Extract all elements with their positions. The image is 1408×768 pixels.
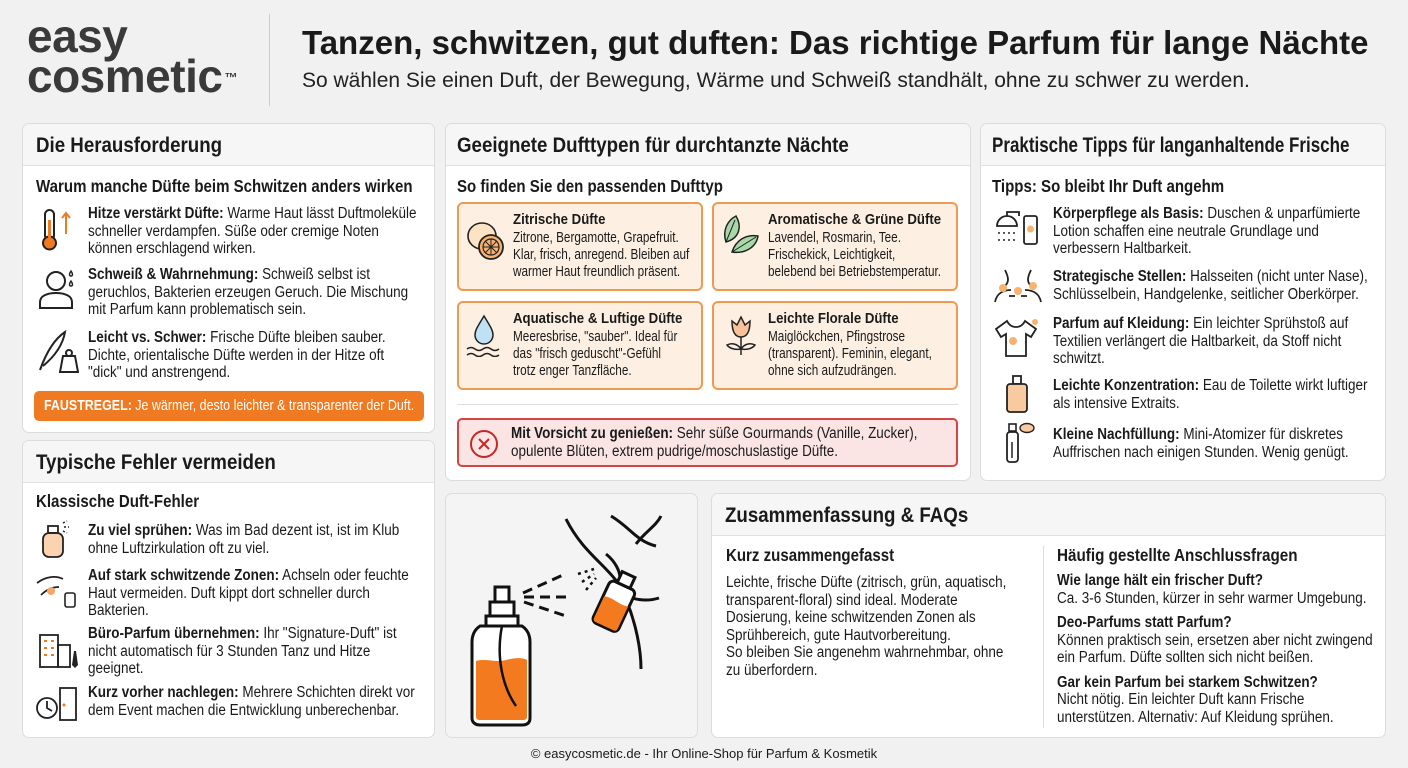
card: Aromatische: Frischekick, Leichtigkeit, [768,247,895,263]
card: Aquatische: das "frisch geduscht"-Gefühl [513,346,661,362]
illustration: spraying perfume [445,493,698,738]
FAQs: Gar kein Parfum bei starkem Schwitzen? [1057,674,1318,690]
item: Bakterien. [88,602,149,619]
item: Schweiss: geruchlos, Bakterien erzeugen Geruch. Die Mischung [88,284,408,300]
logo [27,10,237,102]
panel: Praktische Tipps [980,123,1386,481]
title: Tanzen, schwitzen, gut duften: Das richtige Parfum für lange Nächte [302,24,1369,61]
panel: Zusammenfassung & FAQs: Zusammenfassung & FAQs [725,503,968,527]
item: Leicht vs Schwer: "dick" und anstrengend. [88,364,230,381]
FAQs: Deo-Parfums statt Parfum? [1057,614,1232,631]
item [1053,426,1349,460]
panel: Die Herausforderung [22,123,435,433]
icon: armpit [36,576,76,608]
item [88,522,399,556]
subtitle: So wählen Sie einen Duft, der Bewegung, Wärme und Schweiß standhält, ohne zu schwer zu werden. [302,69,1250,92]
FAQs: ein Parfum. Düfte sollten sich nicht beißen. [1057,649,1313,666]
subheading: Klassische Duft-Fehler [36,491,199,511]
item: Strategische Stellen: Halsseiten (nicht unter Nase), [1053,268,1368,285]
item: als intensive Extraits. [1053,394,1180,412]
FAQs: Nicht nötig. Ein leichter Duft kann Frische [1057,691,1304,708]
panel: Dufttypen: Geeignete Dufttypen für durchtanzte Nächte [457,133,849,157]
item: Hitze: Hitze verstärkt Düfte: Warme Haut lässt Duftmoleküle [88,205,416,222]
panel: Typische Fehler: Typische Fehler vermeiden [36,450,276,474]
subheading: Kurz zusammengefasst: Kurz zusammengefasst [726,545,894,565]
item: Schlüsselbein, Handgelenke, seitlicher Oberkörper. [1053,286,1359,302]
panel: Die Herausforderung: Die Herausforderung [36,133,222,157]
item: Textilien verlängert die Haltbarkeit, da Stoff nicht [1053,332,1341,350]
item: Hitze [88,205,416,257]
card: Aromatische: belebend bei Betriebstemperatur. [768,264,941,280]
logo: cosmetic™ [27,50,237,102]
icon: leaves [724,215,759,254]
item: Schweiss [88,266,408,318]
footer: © easycosmetic.de - Ihr Online-Shop für Parfum & Kosmetik [531,746,877,761]
icon: feather and weight [39,330,79,373]
text: summary [726,574,1006,678]
card: Aquatische [457,301,703,390]
card: Florale: ohne sich aufzudrängen. [768,363,897,379]
item [88,684,415,718]
item: Schweiss: Schweiß & Wahrnehmung: Schweiß selbst ist [88,266,370,283]
card: Zitrische: warmer Haut freundlich präsent. [513,264,680,280]
item: verbessern Haltbarkeit. [1053,240,1192,257]
item: Kleine Nachfüllung: Mini-Atomizer für diskretes [1053,426,1343,443]
icon: lemon [467,222,504,260]
item: Körperpflege als Basis: Duschen & unparfümierte [1053,205,1360,222]
item [88,625,397,677]
item [1053,205,1360,257]
icon: x circle [470,430,498,458]
card: Aromatische [712,202,958,291]
FAQs: Können praktisch sein, ersetzen aber nicht zwingend [1057,632,1373,648]
icon: atomizer [1006,422,1035,463]
item [1053,315,1348,367]
item [1053,377,1368,412]
icon: tulip [726,316,756,355]
item: Parfum auf Kleidung: Ein leichter Sprühstoß auf [1053,315,1348,332]
FAQs: unterstützen. Alternativ: Auf Kleidung sprühen. [1057,708,1334,726]
item: Hitze: können erschlagend wirken. [88,240,256,257]
item: Leicht vs Schwer: Dichte, orientalische Düfte werden in der Hitze oft [88,346,384,364]
card: Aromatische: Aromatische & Grüne Düfte [768,211,941,228]
panel: Dufttypen [445,123,971,481]
item: ohne Luftzirkulation oft zu viel. [88,540,269,556]
item: Kurz vorher nachlegen: Mehrere Schichten direkt vor [88,684,415,701]
card: Florale: (transparent). Feminin, elegant, [768,346,932,362]
FAQs: Häufig gestellte Anschlussfragen [1057,545,1298,565]
FAQs: Ca. 3-6 Stunden, kürzer in sehr warmer Umgebung. [1057,590,1367,606]
text: summary: transparent-floral) sind ideal. Moderate [726,592,958,608]
item: Auffrischen nach einigen Stunden. Wenig genügt. [1053,444,1349,460]
item: Auf stark schwitzende Zonen: Achseln oder feuchte [88,567,409,584]
card: Zitrische: Zitrische Düfte [513,211,605,228]
callout: Vorsicht [457,418,958,467]
item: dem Event machen die Entwicklung unberechenbar. [88,702,399,718]
FAQs: Wie lange hält ein frischer Duft? [1057,572,1263,589]
card: Florale: Leichte Florale Düfte [768,310,899,327]
icon: clock and door [36,687,77,721]
icon: office [39,634,78,668]
item: Zu viel sprühen: Was im Bad dezent ist, ist im Klub [88,522,399,539]
callout: Vorsicht: opulente Blüten, extrem pudrige/moschuslastige Düfte. [511,442,838,460]
text: summary: zu überfordern. [726,662,817,678]
item: nicht automatisch für 3 Stunden Tanz und Hitze [88,642,370,660]
card: Aquatische: Aquatische & Luftige Düfte [513,310,682,327]
card: Aquatische: Meeresbrise, "sauber". Ideal für [513,329,677,345]
icon: thermometer [42,209,71,250]
item: Schweiss: mit Parfum kann problematisch sein. [88,301,306,318]
icon: bottle spraying [42,520,69,558]
subheading: So finden Sie den passenden Dufttyp [457,176,723,196]
logo: easy [27,10,127,62]
item: Leicht vs Schwer [88,329,386,381]
item: Hitze: schneller verdampfen. Süße oder cremige Noten [88,222,379,240]
item: Leicht vs Schwer: Leicht vs. Schwer: Frische Düfte bleiben sauber. [88,329,386,346]
icon: t-shirt [994,319,1038,357]
callout: Vorsicht: Mit Vorsicht zu genießen: Sehr süße Gourmands (Vanille, Zucker), [511,425,917,442]
card: Zitrische: Klar, frisch, anregend. Bleiben auf [513,247,689,263]
card: Florale: Maiglöckchen, Pfingstrose [768,329,905,345]
item: schwitzt. [1053,350,1105,367]
icon: person sweating [39,270,74,309]
card: Florale [712,301,958,390]
item [1053,268,1368,302]
subheading: Warum manche Düfte beim Schwitzen anders wirken [36,176,413,196]
panel: Praktische Tipps: Praktische Tipps für langanhaltende Frische [992,133,1349,157]
text: summary: So bleiben Sie angenehm wahrnehmbar, ohne [726,644,1003,661]
text: summary: Sprühbereich, gute Hautvorbereitung. [726,626,951,644]
item: geeignet. [88,660,143,677]
icon: water drop [466,314,500,357]
item: Leichte Konzentration: Eau de Toilette wirkt luftiger [1053,377,1367,394]
card: Zitrische: Zitrone, Bergamotte, Grapefruit. [513,230,679,246]
item: Lotion schaffen eine neutrale Grundlage und [1053,222,1319,240]
icon: perfume bottle [1006,375,1028,413]
item [88,567,409,619]
subheading: Tipps: So bleibt Ihr Duft angehm [992,176,1224,196]
card: Zitrische [457,202,703,291]
item: Büro-Parfum übernehmen: Ihr "Signature-Duft" ist [88,625,397,642]
callout: Faustregel: FAUSTREGEL: Je wärmer, desto leichter & transparenter der Duft. [44,397,414,414]
item: Haut vermeiden. Duft kippt dort schneller durch [88,584,370,602]
text: summary: Dosierung, keine schwitzenden Zonen als [726,609,976,626]
text: summary: Leichte, frische Düfte (zitrisch, grün, aquatisch, [726,574,1006,591]
icon: neck points [994,270,1042,302]
card: Aquatische: trotz enger Tanzfläche. [513,363,632,379]
panel: Typische Fehler [22,440,435,738]
FAQs [1057,545,1373,726]
card: Aromatische: Lavendel, Rosmarin, Tee. [768,230,901,246]
panel: Zusammenfassung & FAQs [711,493,1386,738]
icon: shower and lotion [996,211,1038,245]
callout: Faustregel [34,391,424,421]
